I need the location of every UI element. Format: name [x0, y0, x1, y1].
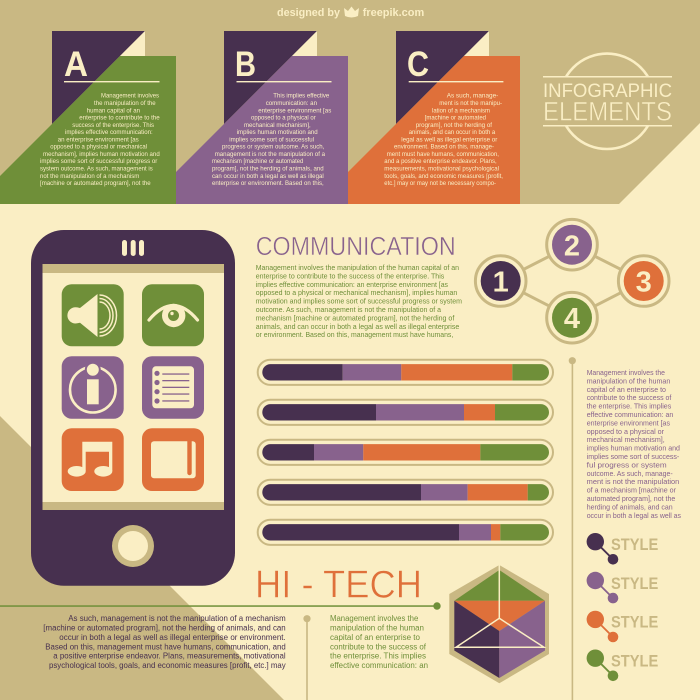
icon: book	[142, 428, 204, 491]
text block: right column	[587, 368, 681, 520]
text block: card A body: system outcome. As such, management is	[40, 166, 153, 172]
green rule with end dot	[0, 602, 441, 610]
text block: card A body: the manipulation of the	[94, 100, 156, 107]
text block: card A body: opposed to a physical or mechanical	[50, 144, 148, 151]
text block: card A body	[40, 93, 160, 187]
heading: communication: COMMUNICATION	[256, 233, 456, 261]
text block: card B body: program], not the herding of animals, and	[212, 166, 324, 172]
text block: card A body: success of the enterprise. This	[72, 122, 155, 129]
text block: card A body: not the manipulation of a mechanism	[40, 173, 139, 180]
text block: card B body: progress or system outcome. As such,	[222, 144, 324, 151]
text block: card A body: implies some sort of successful progress or	[40, 158, 158, 165]
panel: card A	[0, 31, 176, 204]
text block: card A body: human capital of an	[87, 107, 140, 114]
text block: right column: outcome. As such, manage-	[587, 469, 673, 478]
style item: dark: STYLE	[611, 536, 658, 554]
text block: right column: implies human motivation and	[587, 444, 680, 453]
text block: card A body: Management involves	[101, 93, 160, 100]
text block: card C body: ment is not the manipu-	[439, 100, 502, 107]
text block: card C body: lation of a mechanism	[432, 107, 490, 114]
text block: card B body: opposed to a physical or	[251, 114, 316, 122]
panel: card C	[348, 31, 520, 204]
node 3	[618, 256, 669, 306]
title: infographic elements logo	[543, 54, 672, 149]
text block: hi-tech left paragraph: As such, management is not the manipulation of a mechanism	[68, 614, 286, 623]
text block: right column: ment is not the manipulation	[587, 477, 679, 486]
title: infographic elements logo: ELEMENTS	[543, 97, 672, 127]
text block: communication body: animals, and can occur in both a legal as well as illegal enterprise	[256, 322, 459, 331]
style item: green: STYLE	[611, 652, 658, 670]
middle column timeline rule	[303, 615, 311, 700]
legend: style markers	[587, 533, 658, 681]
node 3: 3	[636, 266, 652, 298]
text block: hi-tech left paragraph: [machine or automated program], not the herding of animals, and can	[43, 624, 286, 632]
screen	[42, 264, 224, 510]
text block: right column: herding of animals, and can	[587, 502, 673, 511]
text block: communication body: enterprise to contribute to the success of the enterprise. This	[256, 271, 445, 280]
credit line: designed by freepik: freepik.com	[363, 7, 424, 19]
text block: communication body: mechanism [machine or automated program], not the herding of	[256, 313, 454, 322]
text block: card B body: enterprise or environment. Based on this,	[212, 180, 324, 187]
text block: communication body: opposed to a physical or mechanical mechanism], implies human	[256, 288, 457, 297]
credit line: designed by freepik	[277, 6, 424, 19]
text block: hi-tech middle paragraph: effective communication: an	[330, 661, 428, 670]
text block: card C body: etc.] may or may not be necessary compo-	[384, 180, 496, 187]
text block: communication body: or environment. Based on this, management must have humans,	[256, 330, 453, 339]
text block: card A body: mechanism], implies human motivation and	[43, 151, 160, 158]
icon: info	[62, 356, 124, 419]
style item: dark	[587, 533, 658, 565]
text block: card B body: management is not the manipulation of a	[215, 151, 325, 158]
text block: hi-tech left paragraph	[43, 614, 286, 670]
style item: orange: STYLE	[611, 614, 658, 632]
text block: right column: automated program], not the	[587, 494, 675, 503]
text block: communication body: motivation and implies some sort of successful progress or system	[256, 297, 462, 306]
heading: letter C: C	[407, 45, 429, 84]
text block: hi-tech middle paragraph: Management involves the	[330, 614, 419, 623]
text block: card C body: measurements, motivational psychological	[384, 166, 500, 172]
text block: communication body	[256, 263, 462, 339]
text block: card B body: communication: an	[266, 100, 317, 107]
text block: right column: Management involves the	[587, 368, 665, 377]
text block: card A body: [machine or automated program], not the	[40, 180, 151, 187]
chart: numbered network diagram	[475, 219, 669, 343]
icon: speaker slots	[122, 240, 144, 256]
text block: card A body: an enterprise environment [as	[58, 136, 139, 143]
text block: right column: capital of an enterprise to	[587, 385, 666, 394]
text block: right column: of a mechanism [machine or	[587, 486, 677, 495]
text block: hi-tech left paragraph: Based on this, management must have humans, communication, and	[45, 642, 286, 651]
style item: orange	[587, 611, 658, 642]
text block: card B body: implies some sort of successful	[229, 136, 315, 143]
icon: hexagon cube	[449, 565, 549, 683]
text block: hi-tech middle paragraph: the enterprise. This implies	[330, 652, 426, 661]
text block: right column: contribute to the success of	[587, 393, 671, 402]
text block: right column: enterprise environment [as	[587, 418, 670, 427]
text block: card C body	[384, 93, 503, 187]
bar 3	[258, 440, 553, 465]
icon: volume	[62, 284, 124, 346]
text block: card C body: As such, manage-	[447, 93, 498, 100]
bar 1	[258, 360, 553, 385]
text block: card B body	[212, 93, 332, 187]
text block: card B body: This implies effective	[273, 93, 330, 100]
text block: right column: ful progress or system	[587, 460, 667, 469]
text block: communication body: Management involves the manipulation of the human capital of an	[256, 263, 459, 272]
text block: card B body: can occur in both a legal as well as illegal	[212, 173, 324, 180]
node 1	[475, 256, 526, 306]
panel: smartphone	[31, 230, 235, 586]
text block: hi-tech left paragraph: a positive enterprise endeavor. Plans, measurements, motivational	[53, 652, 286, 661]
text block: card B body: mechanism [machine or automated	[212, 158, 304, 165]
text block: card A body: implies effective communication:	[65, 129, 153, 136]
bar 2	[258, 400, 553, 425]
text block: card C body: animals, and can occur in both a	[409, 129, 496, 136]
text block: hi-tech middle paragraph: manipulation of the human	[330, 624, 424, 632]
style item: purple	[587, 572, 658, 603]
text block: hi-tech middle paragraph	[330, 614, 428, 670]
text block: card A body: enterprise to contribute to the	[79, 114, 160, 122]
panel: card B	[176, 31, 348, 204]
credit line: designed by freepik: designed by	[277, 7, 341, 19]
text block: right column: mechanical mechanism],	[587, 435, 665, 444]
text block: right column: effective communication: an	[587, 410, 673, 419]
text block: card C body: [machine or automated	[425, 114, 486, 122]
heading: letter A: A	[64, 45, 88, 84]
text block: hi-tech left paragraph: psychological tools, goals, and economic measures [profit, etc.] may	[49, 661, 286, 670]
text block: right column: manipulation of the human	[587, 376, 670, 385]
text block: card C body: program], not the herding of	[416, 122, 492, 129]
node 1: 1	[493, 266, 509, 298]
text block: card C body: ment must have humans, communication,	[387, 151, 499, 158]
bar 4	[258, 480, 553, 505]
text block: card C body: legal as well as illegal enterprise or	[401, 136, 498, 143]
text block: card C body: environment. Based on this, manage-	[394, 144, 494, 151]
text block: hi-tech middle paragraph: contribute to the success of	[330, 642, 427, 651]
text block: right column: opposed to a physical or	[587, 427, 665, 436]
heading: letter B: B	[235, 45, 256, 84]
text block: card B body: implies human motivation and	[237, 129, 318, 136]
text block: card C body: and a positive enterprise endeavor. Plans,	[384, 158, 497, 165]
text block: card C body: tools, goals, and economic measures [profit,	[384, 173, 503, 180]
text block: right column: implies some sort of success-	[587, 452, 680, 461]
chart: stacked progress bars	[258, 360, 553, 545]
style item: purple: STYLE	[611, 575, 658, 593]
home button	[112, 525, 154, 567]
right column timeline rule	[569, 357, 576, 700]
heading: hi-tech: HI - TECH	[255, 564, 422, 607]
text block: communication body: implies effective communication: an enterprise environment [as	[256, 280, 448, 289]
text block: right column: the enterprise. This implies	[587, 402, 672, 411]
node 2: 2	[564, 230, 580, 262]
icon: list	[142, 356, 204, 419]
icon: music note	[62, 428, 124, 491]
text block: hi-tech middle paragraph: capital of an enterprise to	[330, 633, 421, 642]
node 4	[547, 292, 597, 343]
text block: right column: occur in both a legal as well as	[587, 511, 681, 520]
icon: eye	[142, 284, 204, 346]
text block: card B body: mechanical mechanism],	[244, 122, 311, 129]
node 4: 4	[564, 303, 580, 335]
text block: card B body: enterprise environment [as	[258, 107, 332, 114]
node 2	[547, 219, 597, 270]
text block: communication body: outcome. As such, management is not the manipulation of a	[256, 305, 441, 314]
title: infographic elements logo: INFOGRAPHIC	[543, 80, 672, 102]
style item: green	[587, 650, 658, 681]
bar 5	[258, 520, 553, 545]
text block: hi-tech left paragraph: occur in both a legal as well as illegal enterprise or environment.	[59, 633, 286, 642]
